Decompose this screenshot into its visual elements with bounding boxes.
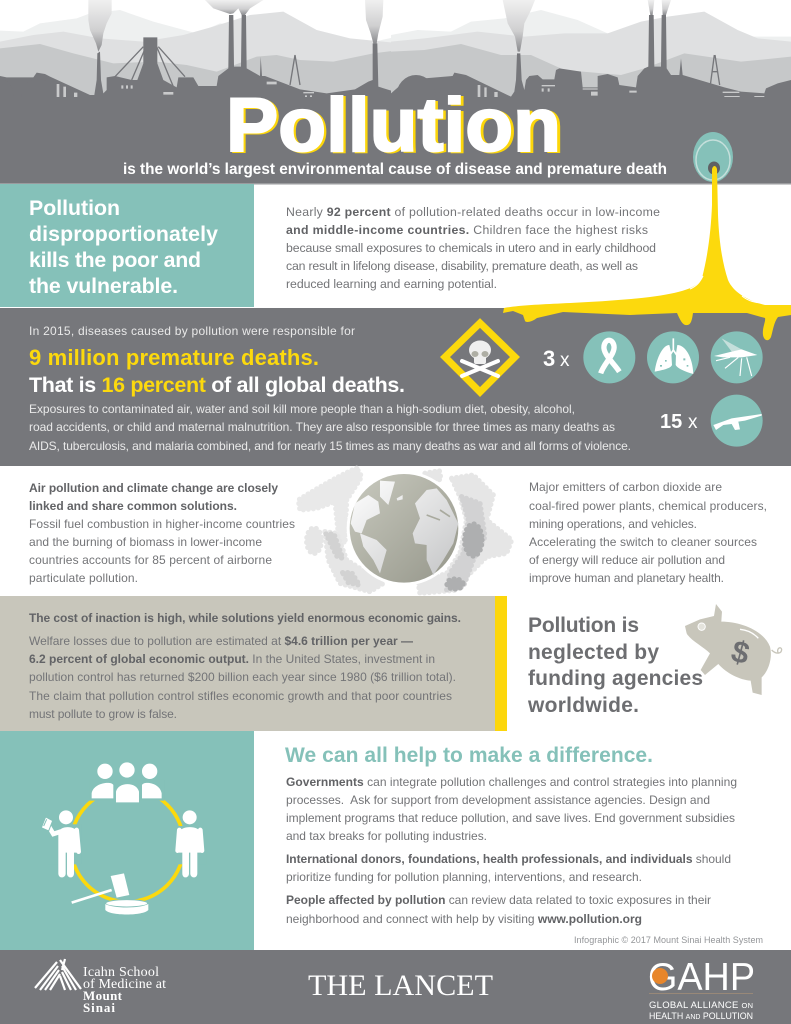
panel: 9 million deaths statistics: road accidents, or child and maternal malnutrition. They are also responsible for three times as many deaths as	[29, 420, 615, 434]
text block: air pollution and climate: particulate pollution.	[29, 571, 138, 585]
logo: Icahn School of Medicine at Mount Sinai: Sinai	[83, 1000, 115, 1015]
panel: poor and vulnerable heading	[29, 196, 218, 298]
icon: rifle	[711, 395, 763, 447]
label: 3 x: x	[560, 350, 570, 371]
panel: 9 million deaths statistics: 9 million premature deaths.	[29, 345, 319, 370]
label: 15 x: 15	[660, 411, 682, 433]
heading: neglected by funding agencies	[527, 614, 703, 717]
text block: carbon dioxide emitters: of energy will reduce air pollution and	[529, 553, 725, 567]
panel: cost of inaction text	[29, 611, 461, 721]
text block: governments: and tax breaks for polluting industries.	[286, 829, 487, 843]
text block: governments: implement programs that reduce pollution, and save lives. End government subsidies	[286, 811, 735, 825]
text block: international donors	[286, 852, 731, 884]
logo: The Lancet: THE LANCET	[308, 969, 493, 1002]
subtitle: is the world’s largest environmental cause of disease and premature death	[123, 161, 667, 178]
text block: air pollution and climate: countries accounts for 85 percent of airborne	[29, 553, 272, 567]
text block: deaths in low-income countries	[286, 205, 660, 291]
label: 15 x: x	[688, 412, 698, 433]
icon: mosquito	[711, 331, 763, 383]
panel: 9 million deaths statistics: That is 16 percent of all global deaths.	[29, 373, 405, 397]
icon: piggy bank: $	[728, 634, 753, 671]
text block: air pollution and climate: Air pollution and climate change are closely	[29, 481, 278, 495]
text block: deaths in low-income countries: Nearly 92 percent of pollution-related deaths occur in low-income	[286, 205, 660, 219]
text block: carbon dioxide emitters	[529, 480, 767, 585]
icon: piggy bank	[685, 604, 782, 695]
logo: GAHP	[648, 956, 755, 1022]
text block: carbon dioxide emitters: coal-fired power plants, chemical producers,	[529, 499, 767, 513]
panel: poor and vulnerable heading: the vulnerable.	[29, 274, 178, 298]
heading: neglected by funding agencies: neglected by	[528, 641, 659, 664]
panel: cost of inaction text: The claim that pollution control stifles economic growth and that poor countries	[29, 689, 452, 703]
copyright note: Infographic © 2017 Mount Sinai Health System	[574, 935, 763, 945]
text block: carbon dioxide emitters: Major emitters of carbon dioxide are	[529, 480, 722, 494]
icon: pipe opening	[693, 132, 733, 182]
text block: air pollution and climate: Fossil fuel combustion in higher-income countries	[29, 517, 295, 531]
text block: international donors: International donors, foundations, health professionals, and individuals should	[286, 852, 731, 866]
text block: deaths in low-income countries: and middle-income countries. Children face the highest risks	[286, 223, 648, 237]
text block: carbon dioxide emitters: Accelerating the switch to cleaner sources	[529, 535, 757, 549]
logo: GAHP: GLOBAL ALLIANCE ON	[649, 1000, 753, 1011]
text block: carbon dioxide emitters: improve human and planetary health.	[529, 571, 724, 585]
panel: cost of inaction text: The cost of inaction is high, while solutions yield enormous economic gains.	[29, 611, 461, 625]
label: 15 x	[660, 411, 698, 433]
text block: deaths in low-income countries: can result in lifelong disease, disability, premature death, as well as	[286, 259, 638, 273]
logo: Icahn School of Medicine at Mount Sinai: Mount	[83, 988, 123, 1003]
panel: poor and vulnerable heading: Pollution	[29, 196, 120, 220]
text block: governments	[286, 775, 737, 843]
label: 3 x: 3	[543, 346, 555, 371]
logo: Icahn School of Medicine at Mount Sinai: of Medicine at	[83, 977, 166, 992]
icon: AIDS ribbon	[583, 331, 635, 383]
text block: air pollution and climate	[29, 481, 295, 585]
logo: Icahn School of Medicine at Mount Sinai: Icahn School	[83, 965, 159, 980]
panel: 9 million deaths statistics: Exposures to contaminated air, water and soil kill more people than a high-sodium diet, obesity, alcohol,	[29, 402, 575, 416]
heading: neglected by funding agencies: Pollution is	[528, 614, 639, 637]
logo: Icahn School of Medicine at Mount Sinai	[35, 959, 166, 1015]
illustration: people around a ring with gavel	[41, 762, 207, 914]
header skyline illustration: right half	[391, 0, 791, 118]
panel: cost of inaction text: Welfare losses due to pollution are estimated at $4.6 trillion per year —	[29, 634, 413, 648]
text block: people affected: People affected by pollution can review data related to toxic exposures in their	[286, 893, 711, 907]
illustration: globe and smoke	[298, 468, 512, 593]
header skyline illustration: left half	[0, 0, 400, 111]
panel: cost of inaction text: pollution control has returned $200 billion each year since 1980 ($6 trillion total).	[29, 670, 456, 684]
panel: 9 million deaths statistics: In 2015, diseases caused by pollution were responsible for	[29, 324, 355, 338]
panel: poor and vulnerable heading: disproportionately	[29, 222, 218, 246]
label: 3 x	[543, 346, 570, 371]
text block: governments: Governments can integrate pollution challenges and control strategies into planning	[286, 775, 737, 789]
panel: 9 million deaths statistics: AIDS, tuberculosis, and malaria combined, and for nearly 15 times as many deaths as war and all forms of violence.	[29, 439, 631, 453]
yellow sludge flowing from pipe	[503, 166, 791, 340]
title: Pollution	[228, 84, 564, 169]
panel: cost of inaction text: 6.2 percent of global economic output. In the United States, investment in	[29, 652, 435, 666]
panel: cost of inaction text: must pollute to grow is false.	[29, 707, 177, 721]
heading: neglected by funding agencies: worldwide.	[527, 694, 639, 717]
icon: skull hazard diamond	[445, 323, 515, 392]
text block: international donors: prioritize funding for pollution planning, interventions, and research.	[286, 870, 642, 884]
panel: poor and vulnerable heading: kills the poor and	[29, 248, 201, 272]
text block: deaths in low-income countries: reduced learning and earning potential.	[286, 277, 497, 291]
text block: air pollution and climate: linked and share common solutions.	[29, 499, 237, 513]
text block: carbon dioxide emitters: mining operations, and vehicles.	[529, 517, 697, 531]
text block: deaths in low-income countries: because small exposures to chemicals in utero and in early childhood	[286, 241, 656, 255]
logo: GAHP: HEALTH AND POLLUTION	[649, 1011, 753, 1022]
text block: people affected: neighborhood and connect with help by visiting www.pollution.org	[286, 912, 642, 926]
icon: lungs	[647, 331, 699, 383]
logo: GAHP: GAHP	[648, 956, 755, 999]
heading: we can all help: We can all help to make a difference.	[285, 744, 653, 767]
text block: governments: processes. Ask for support from development assistance agencies. Design and	[286, 793, 710, 807]
text block: people affected	[286, 893, 711, 926]
panel: 9 million deaths statistics	[29, 324, 631, 453]
heading: neglected by funding agencies: funding agencies	[528, 667, 703, 690]
text block: air pollution and climate: and the burning of biomass in lower-income	[29, 535, 262, 549]
title: Pollution	[226, 83, 561, 168]
